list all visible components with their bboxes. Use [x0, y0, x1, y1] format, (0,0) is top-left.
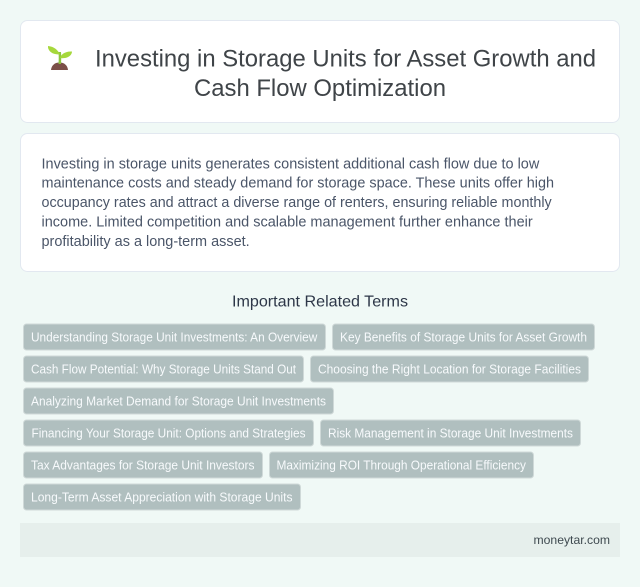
- panel: title card: [20, 20, 620, 122]
- tag: cash flow potential: Cash Flow Potential: Why Storage Units Stand Out: [31, 362, 296, 376]
- text block: description: Investing in storage units generates consistent additional cash flow due to low: [42, 156, 540, 172]
- tag: choosing the right location: [310, 356, 588, 382]
- text block: description: [42, 156, 554, 250]
- tag list: related terms: [24, 324, 594, 510]
- tag: risk management: [320, 420, 580, 446]
- heading: title: Investing in Storage Units for Asset Growth and: [95, 46, 596, 72]
- tag: financing your storage unit: [24, 420, 314, 446]
- heading: title: [95, 46, 596, 102]
- tag: maximizing ROI: Maximizing ROI Through Operational Efficiency: [276, 458, 527, 472]
- tag: maximizing ROI: [270, 452, 534, 478]
- panel: description card: [20, 134, 620, 272]
- heading: important related terms: Important Related Terms: [232, 294, 408, 311]
- text block: description: income. Limited competition and scalable management further enhance their: [42, 214, 533, 230]
- text block: description: occupancy rates and attract a diverse range of renters, ensuring reliable monthly: [42, 195, 552, 211]
- tag: choosing the right location: Choosing the Right Location for Storage Facilities: [318, 362, 581, 376]
- tag: tax advantages: Tax Advantages for Storage Unit Investors: [31, 458, 254, 472]
- footer bar: [20, 523, 620, 557]
- tag: understanding storage unit investments: [24, 324, 326, 350]
- tag: key benefits: Key Benefits of Storage Units for Asset Growth: [340, 330, 587, 344]
- tag: financing your storage unit: Financing Your Storage Unit: Options and Strategies: [32, 426, 306, 440]
- tag: long-term asset appreciation: Long-Term Asset Appreciation with Storage Units: [31, 490, 292, 504]
- tag: risk management: Risk Management in Storage Unit Investments: [328, 426, 573, 440]
- footer bar: moneytar.com: [534, 533, 610, 547]
- tag: understanding storage unit investments: Understanding Storage Unit Investments: An Overview: [31, 330, 318, 344]
- text block: description: maintenance costs and steady demand for storage space. These units offer high: [42, 175, 554, 191]
- icon: seedling: [48, 46, 72, 70]
- tag: analyzing market demand: [24, 388, 334, 414]
- text block: description: profitability as a long-term asset.: [42, 234, 250, 250]
- tag: key benefits: [332, 324, 594, 350]
- tag: cash flow potential: [24, 356, 304, 382]
- tag: long-term asset appreciation: [24, 484, 300, 510]
- tag: analyzing market demand: Analyzing Market Demand for Storage Unit Investments: [31, 394, 326, 408]
- tag: tax advantages: [24, 452, 262, 478]
- heading: title: Cash Flow Optimization: [194, 75, 446, 102]
